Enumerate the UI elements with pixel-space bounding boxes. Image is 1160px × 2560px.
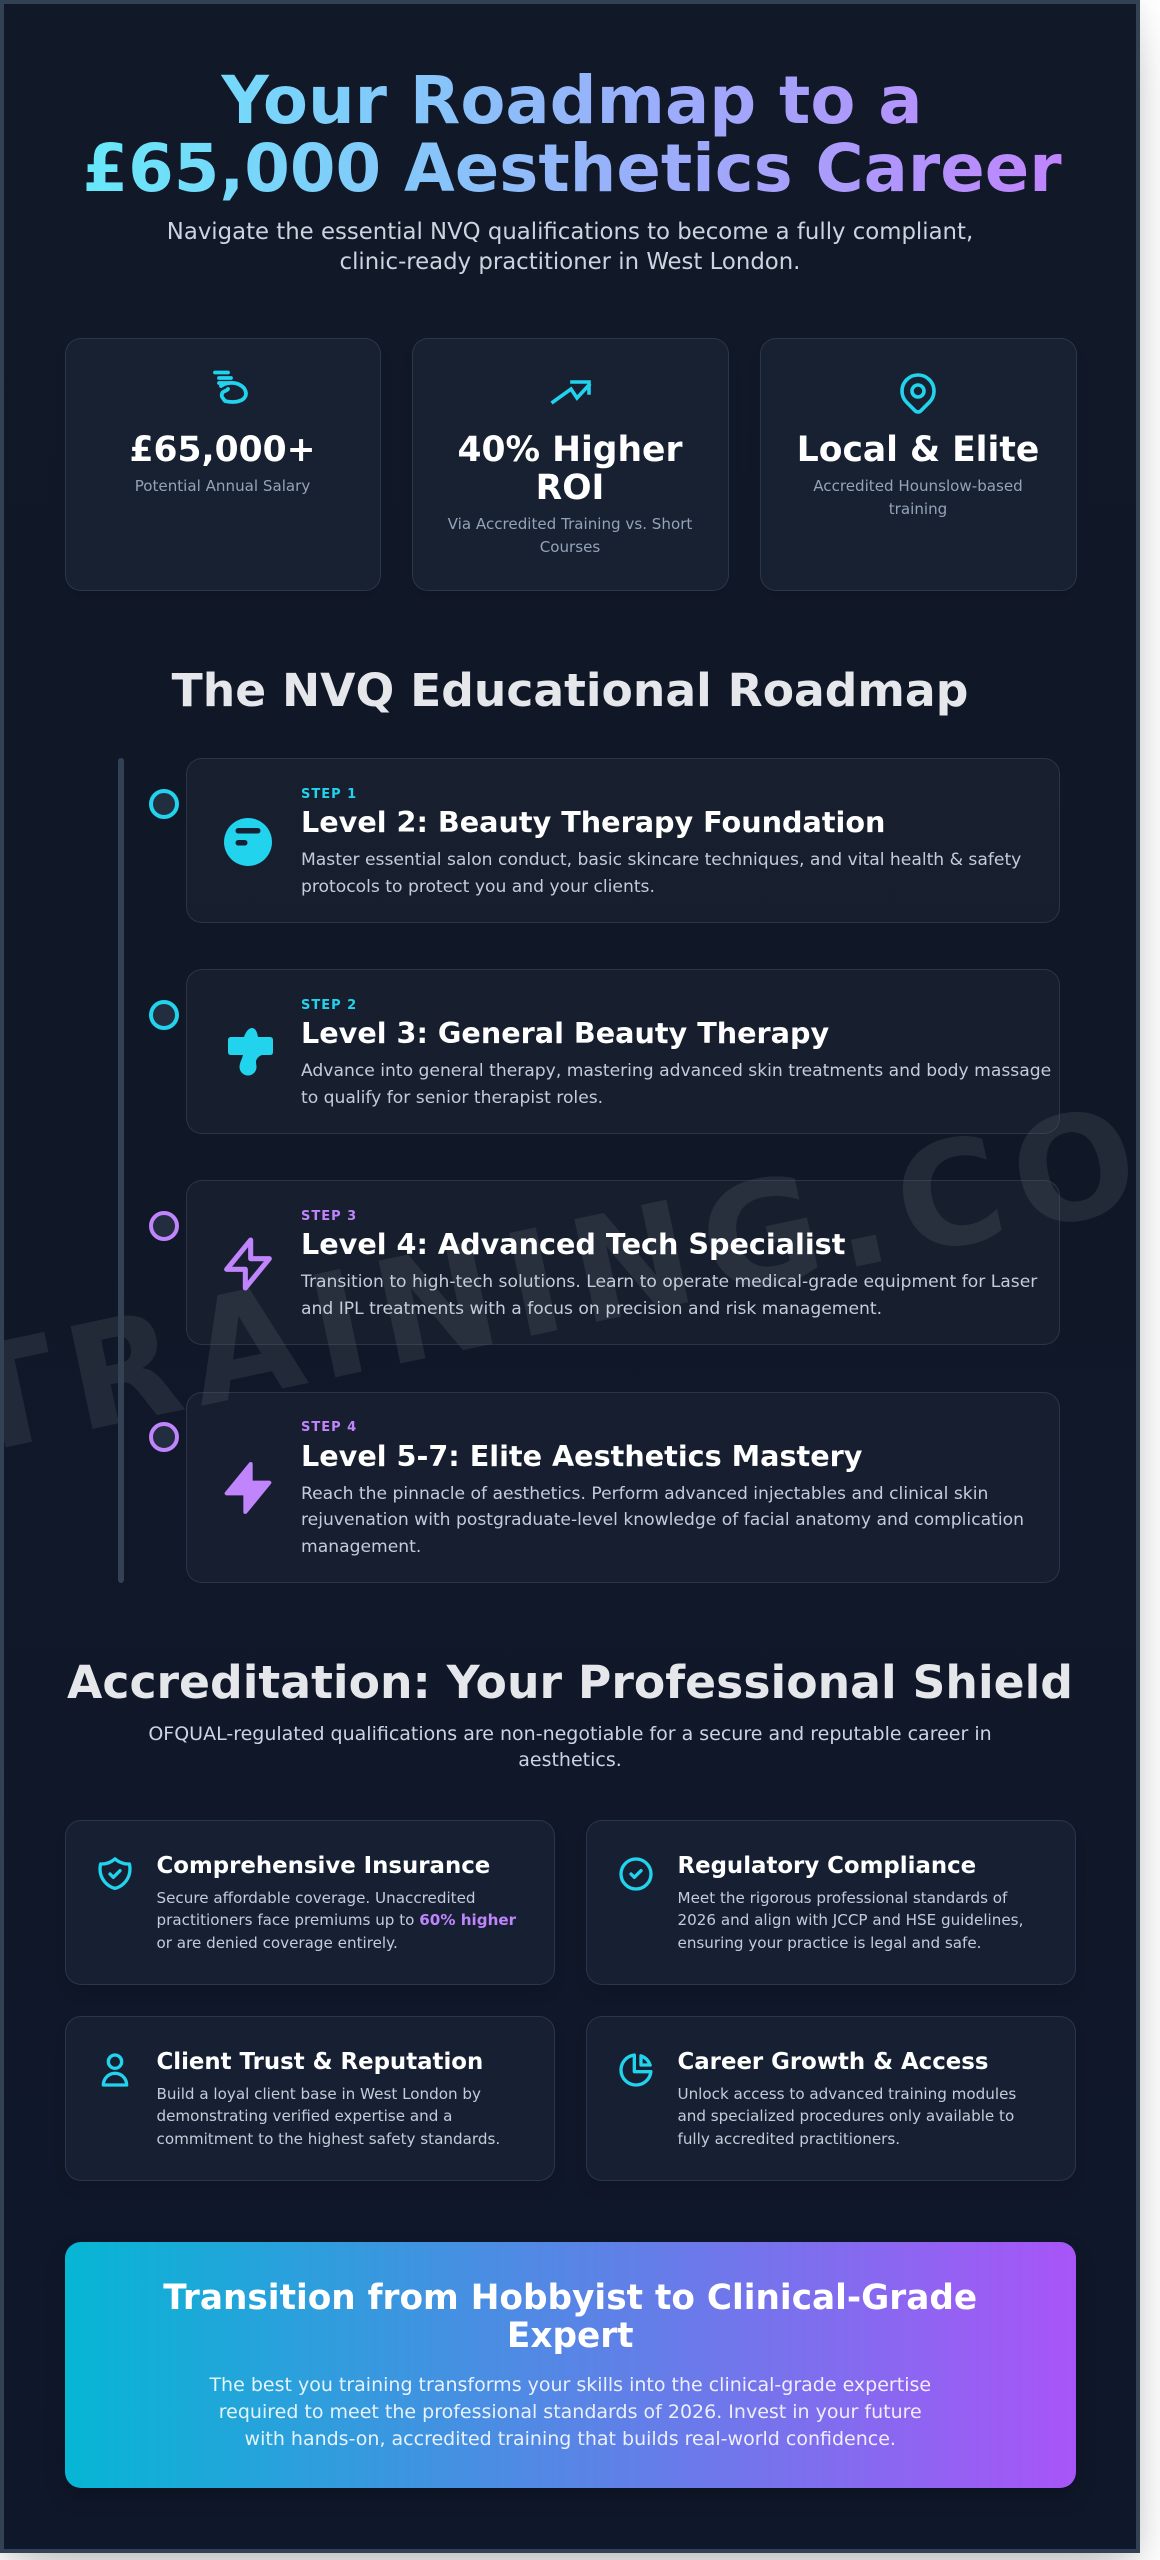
step description xyxy=(300,1272,1038,1319)
call to action title: Expert xyxy=(507,2316,634,2356)
icon: pie chart xyxy=(619,2053,653,2087)
step title: Level 5-7: Elite Aesthetics Mastery xyxy=(301,1438,862,1472)
step label: STEP 4 xyxy=(301,1420,357,1435)
accreditation subtitle: aesthetics. xyxy=(518,1749,622,1771)
stat value: 40% Higher xyxy=(458,430,682,470)
subtitle xyxy=(167,218,973,275)
title: £65,000 Aesthetics Career xyxy=(82,131,1062,207)
panel text: Secure affordable coverage. Unaccredited xyxy=(156,1888,476,1906)
panel text: fully accredited practitioners. xyxy=(678,2130,900,2148)
stat value: £65,000+ xyxy=(129,430,316,470)
icon: general therapy xyxy=(228,1028,273,1076)
panel text: or are denied coverage entirely. xyxy=(156,1934,398,1952)
stat value: ROI xyxy=(536,468,604,508)
step description: Advance into general therapy, mastering advanced skin treatments and body massage xyxy=(301,1061,1051,1081)
panel text xyxy=(156,1888,516,1952)
panel text: commitment to the highest safety standards. xyxy=(156,2130,500,2148)
step description: and IPL treatments with a focus on precision and risk management. xyxy=(301,1299,882,1319)
heading: roadmap: The NVQ Educational Roadmap xyxy=(172,664,968,717)
timeline dot 3 xyxy=(148,1211,178,1241)
step description xyxy=(301,850,1021,897)
stat label: Accredited Hounslow-based xyxy=(813,477,1023,495)
call to action title: Transition from Hobbyist to Clinical-Grade xyxy=(163,2278,977,2318)
stat card: local xyxy=(760,338,1077,591)
step description xyxy=(301,1061,1051,1108)
call to action text: required to meet the professional standards of 2026. Invest in your future xyxy=(219,2401,922,2423)
stat card: salary xyxy=(65,338,381,591)
heading: accreditation: Accreditation: Your Professional Shield xyxy=(67,1656,1073,1709)
panel text: demonstrating verified expertise and a xyxy=(156,2107,452,2125)
timeline dot 4 xyxy=(148,1422,178,1452)
step description xyxy=(301,1484,1024,1557)
icon: person xyxy=(102,2053,128,2087)
panel text xyxy=(678,2084,1016,2148)
title xyxy=(80,67,1064,203)
step title: Level 2: Beauty Therapy Foundation xyxy=(301,805,885,839)
call to action panel xyxy=(64,2242,1076,2488)
stat label: Potential Annual Salary xyxy=(135,477,310,495)
panel text: 2026 and align with JCCP and HSE guidelines, xyxy=(678,1911,1023,1929)
panel: insurance xyxy=(65,1820,555,1984)
call to action text: The best you training transforms your skills into the clinical-grade expertise xyxy=(209,2374,931,2396)
panel title: Client Trust & Reputation xyxy=(156,2048,483,2074)
step label: STEP 1 xyxy=(301,786,357,802)
accreditation subtitle: OFQUAL-regulated qualifications are non-negotiable for a secure and reputable career in xyxy=(148,1723,992,1745)
subtitle: clinic-ready practitioner in West London. xyxy=(340,249,800,275)
timeline dot 1 xyxy=(148,789,178,819)
stat label: Courses xyxy=(540,538,600,556)
icon: trending up xyxy=(550,380,592,404)
icon: filled bolt xyxy=(224,1462,272,1514)
stat value: Local & Elite xyxy=(797,430,1039,470)
icon: outlined bolt xyxy=(224,1238,272,1290)
panel title: Regulatory Compliance xyxy=(678,1852,976,1878)
step description: rejuvenation with postgraduate-level knowledge of facial anatomy and complication xyxy=(301,1510,1024,1530)
step card 2 xyxy=(186,969,1060,1134)
icon: check circle xyxy=(619,1857,653,1891)
call to action title xyxy=(163,2278,977,2356)
panel text: Meet the rigorous professional standards of xyxy=(678,1888,1007,1906)
icon: map pin xyxy=(900,373,936,414)
step title: Level 3: General Beauty Therapy xyxy=(301,1016,829,1050)
stat label xyxy=(813,477,1023,518)
panel title: Comprehensive Insurance xyxy=(156,1852,490,1878)
stat label xyxy=(448,515,692,556)
panel text: practitioners face premiums up to 60% higher xyxy=(156,1911,516,1929)
panel: career growth xyxy=(586,2016,1076,2180)
subtitle: Navigate the essential NVQ qualifications to become a fully compliant, xyxy=(167,218,973,244)
step card 3 xyxy=(186,1180,1060,1345)
step description: management. xyxy=(301,1537,421,1557)
title: Your Roadmap to a xyxy=(221,63,923,139)
stat card: ROI xyxy=(412,338,729,591)
panel text: Build a loyal client base in West London by xyxy=(156,2084,481,2102)
step label: STEP 3 xyxy=(301,1208,357,1224)
step description: protocols to protect you and your clients. xyxy=(301,877,655,897)
step label: STEP 2 xyxy=(301,998,357,1012)
panel: compliance xyxy=(586,1820,1076,1984)
accreditation subtitle xyxy=(148,1723,992,1771)
panel text xyxy=(678,1888,1023,1952)
panel text: and specialized procedures only available to xyxy=(678,2107,1014,2125)
step card 1 xyxy=(186,758,1060,923)
icon: shield xyxy=(98,1857,132,1890)
icon: foundation xyxy=(224,818,272,866)
icon: money xyxy=(213,370,248,404)
panel text: ensuring your practice is legal and safe. xyxy=(678,1934,982,1952)
call to action text: with hands-on, accredited training that builds real-world confidence. xyxy=(245,2428,896,2450)
stat value xyxy=(458,430,682,508)
stat label: Via Accredited Training vs. Short xyxy=(448,515,692,533)
step description: Reach the pinnacle of aesthetics. Perform advanced injectables and clinical skin xyxy=(301,1484,988,1504)
step description: Transition to high-tech solutions. Learn to operate medical-grade equipment for Laser xyxy=(301,1272,1037,1292)
timeline bar xyxy=(118,758,124,1583)
step title: Level 4: Advanced Tech Specialist xyxy=(301,1227,845,1261)
panel text: Unlock access to advanced training modules xyxy=(678,2084,1016,2102)
call to action text xyxy=(209,2374,931,2450)
step description: to qualify for senior therapist roles. xyxy=(301,1088,603,1108)
timeline dot 2 xyxy=(148,1000,178,1030)
step card 4 xyxy=(186,1392,1060,1583)
panel title: Career Growth & Access xyxy=(678,2048,988,2074)
panel: trust xyxy=(65,2016,555,2180)
stat label: training xyxy=(889,500,947,518)
panel text xyxy=(156,2084,500,2148)
step description: Master essential salon conduct, basic skincare techniques, and vital health & safety xyxy=(301,850,1021,870)
